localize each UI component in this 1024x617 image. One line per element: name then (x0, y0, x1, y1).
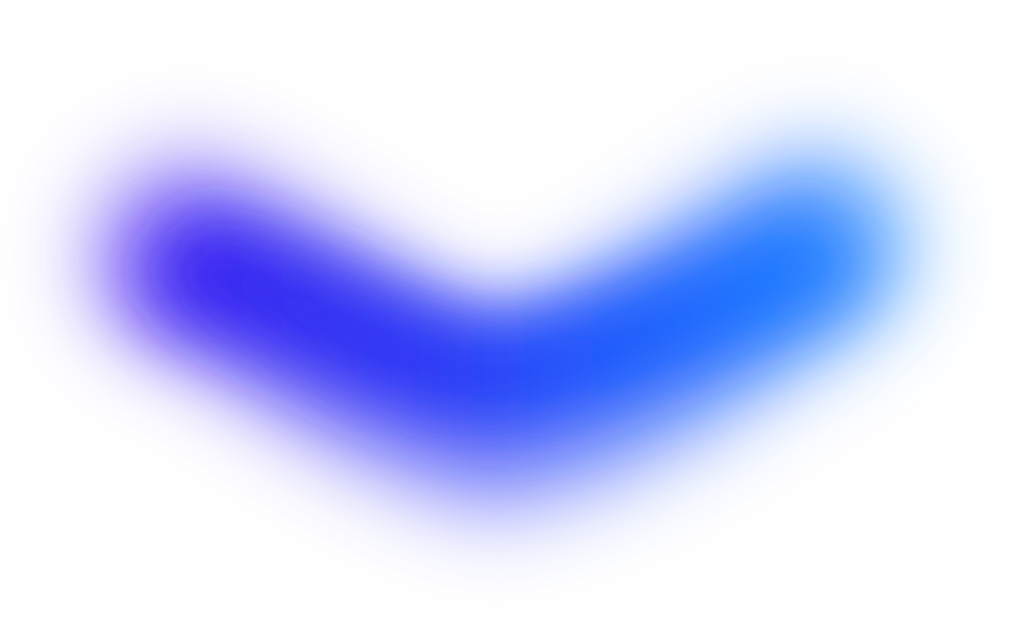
core gradient band (210, 262, 800, 378)
middle glow (195, 252, 812, 402)
outer glow (190, 245, 815, 415)
